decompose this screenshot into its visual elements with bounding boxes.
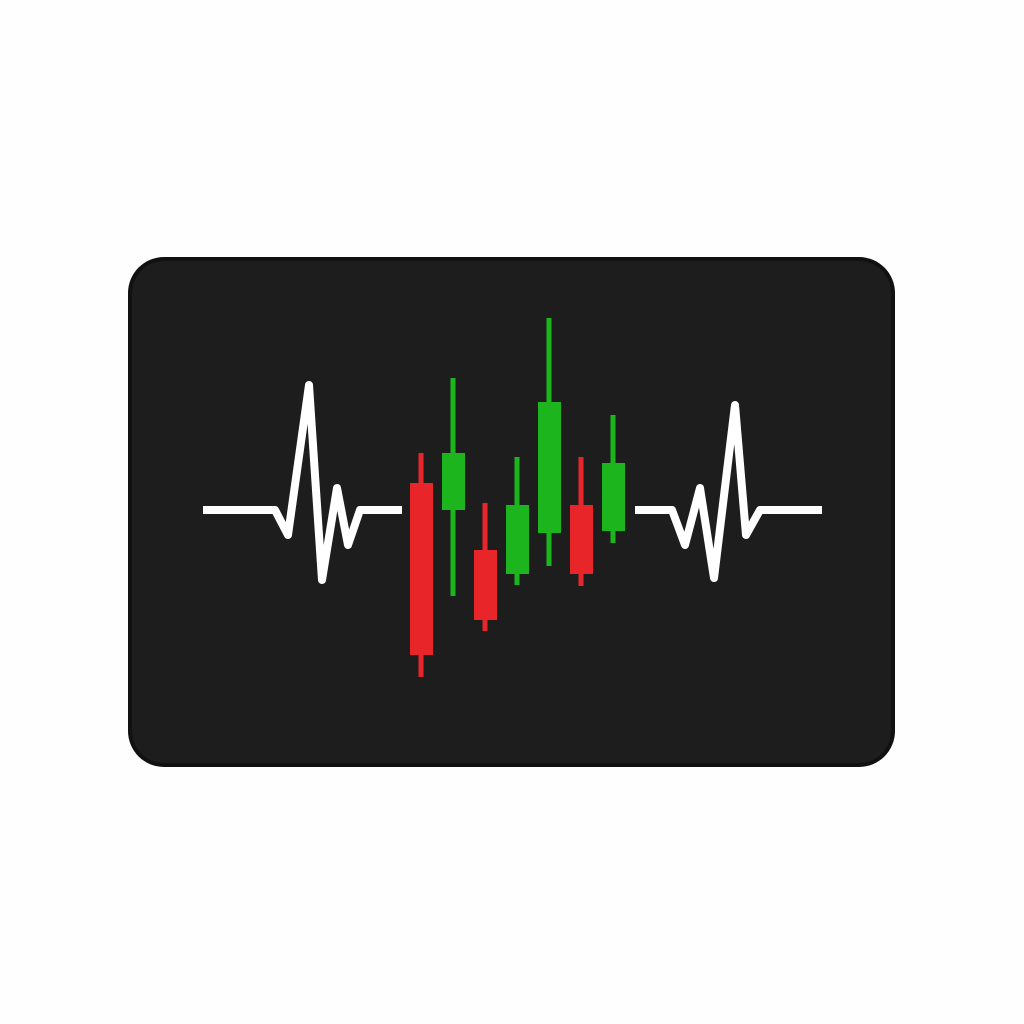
- candle 1 red: [410, 453, 433, 677]
- candle 6 red: [570, 457, 593, 586]
- candle 3 red: [474, 503, 497, 631]
- candle 4 green: [506, 457, 529, 585]
- panel: desk mat: [128, 257, 895, 767]
- candle 5 green: [538, 318, 561, 566]
- icon: left heartbeat line: [203, 385, 402, 580]
- candle 2 green: [442, 378, 465, 596]
- icon: right heartbeat line: [635, 405, 822, 578]
- candle 7 green: [602, 415, 625, 543]
- chart: candlesticks: [410, 318, 625, 677]
